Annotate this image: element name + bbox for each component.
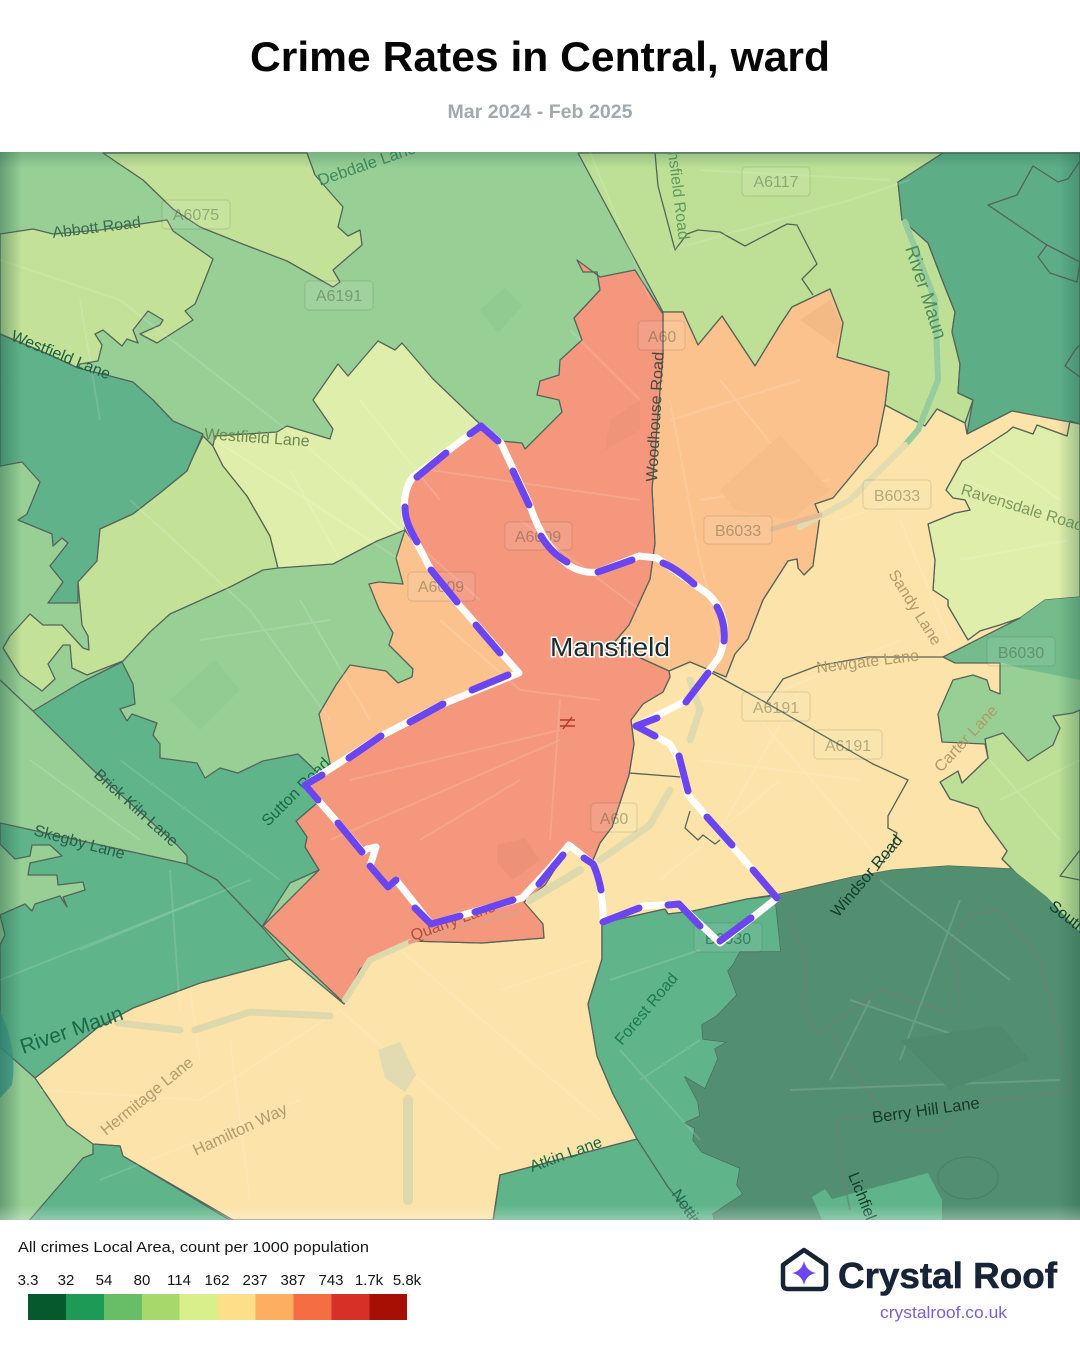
area: red ward and neighbours — [263, 260, 670, 1003]
label: Lichfield: Lichfield — [844, 1170, 882, 1231]
shield: B6033 west — [704, 516, 772, 544]
faint darker paths in dark forest — [788, 910, 1072, 1210]
label: Hermitage Lane: Hermitage Lane — [98, 1054, 197, 1139]
legend scale labels: 743 — [318, 1272, 344, 1289]
label: Quarry Lane: Quarry Lane — [409, 898, 498, 945]
shield: A6075 — [162, 200, 230, 229]
ward outline blue dashes — [305, 426, 777, 941]
area: Skegby green — [0, 823, 290, 1078]
legend scale labels: 54 — [96, 1272, 112, 1289]
area: lime south-east — [940, 710, 1080, 940]
legend scale labels: 162 — [204, 1272, 230, 1289]
icon: railway station — [560, 717, 575, 729]
shield: A6191 east: A6191 — [825, 738, 871, 755]
area: Abbott Road lime — [0, 220, 213, 368]
label: Berry Hill Lane: Berry Hill Lane — [871, 1094, 981, 1127]
label: Westfield Lane centre: Westfield Lane — [204, 426, 310, 450]
shield: A60 north — [638, 321, 685, 350]
faint roads — [0, 152, 1080, 1200]
label: Abbott Road: Abbott Road — [51, 214, 142, 242]
legend scale labels: 237 — [242, 1272, 268, 1289]
label: Sandy Lane: Sandy Lane — [885, 567, 944, 649]
area: west lime — [3, 436, 278, 691]
shield: A60 north: A60 — [648, 329, 676, 346]
legend scale labels: 5.8k — [393, 1272, 422, 1289]
legend — [18, 1239, 422, 1320]
area: Brick Kiln dark green — [33, 662, 319, 927]
legend scale labels — [18, 1272, 422, 1289]
legend scale labels: 32 — [58, 1272, 74, 1289]
shield: A6117 — [742, 167, 810, 196]
label: Forest Road: Forest Road — [612, 970, 682, 1049]
shield: A6075: A6075 — [173, 207, 219, 224]
shield: B6033 east — [863, 480, 931, 509]
shield: A6117: A6117 — [753, 174, 799, 191]
label: Mansfield: Mansfield — [550, 632, 670, 662]
shield: A6009 west — [408, 572, 475, 601]
area: orange west of ward — [319, 530, 519, 768]
area: river teal — [0, 1011, 14, 1098]
legend scale labels: 3.3 — [18, 1272, 38, 1289]
shield: A6191 east — [814, 730, 882, 759]
brand name: Crystal Roof — [838, 1255, 1058, 1296]
area: pale lime north-west of ward — [213, 341, 481, 568]
legend scale labels: 1.7k — [355, 1272, 384, 1289]
label: Windsor Road: Windsor Road — [828, 832, 906, 921]
legend title: All crimes Local Area, count per 1000 population — [18, 1239, 369, 1256]
label: Sutton Road: Sutton Road — [259, 755, 334, 830]
area: darkest green south-east — [685, 866, 1080, 1222]
area: dark green north-east — [898, 153, 1080, 434]
area: green by B6030 — [943, 597, 1080, 680]
district boundary lines — [0, 153, 1080, 1220]
ward boundary: white line with blue dashes — [305, 426, 777, 943]
shield: A60 south — [591, 803, 637, 832]
website url: crystalroof.co.uk — [880, 1304, 1008, 1322]
area: Forest Road green — [493, 895, 781, 1222]
area: small green patch — [812, 1173, 942, 1222]
shield: B6030 south: B6030 — [705, 931, 751, 948]
patch: darker buildings — [313, 325, 998, 1272]
legend scale labels: 80 — [134, 1272, 150, 1289]
shield: A6191 centre: A6191 — [753, 700, 799, 717]
shield: A6009 north — [505, 522, 572, 550]
label: Westfield Lane west: Westfield Lane — [9, 328, 113, 383]
shield: A6191 north: A6191 — [316, 288, 362, 305]
area: orange east — [612, 289, 889, 677]
shield: B6033 west: B6033 — [715, 523, 761, 540]
label: Carter Lane: Carter Lane — [931, 702, 1002, 776]
label: River Maun south: River Maun — [17, 1002, 126, 1059]
shield: A6191 centre — [742, 692, 810, 721]
shield: B6033 east: B6033 — [874, 488, 920, 505]
shield: B6030 south — [694, 923, 762, 952]
ward outline white — [305, 426, 777, 943]
shield: A6009 north: A6009 — [515, 529, 561, 546]
title: Crime Rates in Central, ward — [250, 33, 830, 80]
area: top lime — [103, 153, 362, 287]
label: Mansfield Road: nsfield Road — [664, 150, 692, 241]
area: yellow central-south — [35, 405, 1080, 1220]
road shields — [162, 167, 1055, 952]
legend colour bar — [28, 1294, 407, 1320]
icon: house with star — [783, 1250, 826, 1289]
label: Hamilton Way: Hamilton Way — [190, 1100, 291, 1160]
label: Nottingham: Nottingham — [668, 1187, 729, 1263]
legend scale labels: 114 — [167, 1272, 191, 1289]
shield: B6030 east: B6030 — [998, 645, 1044, 662]
logo: Crystal Roof — [783, 1250, 1058, 1322]
map edge shading — [0, 152, 1080, 1220]
subtitle: date range: Mar 2024 - Feb 2025 — [448, 102, 633, 123]
area: pale lime east — [928, 421, 1080, 640]
shield: A6009 west: A6009 — [418, 579, 464, 596]
faint water and grey features — [118, 222, 938, 1200]
label: Atkin Lane: Atkin Lane — [528, 1134, 605, 1176]
label: River Maun north: River Maun — [900, 243, 950, 342]
area: south-west dark green — [28, 1144, 233, 1222]
area: lime north-east — [578, 153, 973, 426]
label: Woodhouse Road: Woodhouse Road — [643, 351, 668, 482]
area: west dark green — [0, 334, 203, 603]
label: Brick Kiln Lane: Brick Kiln Lane — [90, 766, 181, 850]
shield: A6191 north — [305, 281, 373, 310]
shield: A60 south: A60 — [600, 811, 628, 828]
shield: B6030 east — [987, 637, 1055, 666]
label: Debdale Lane: Debdale Lane — [315, 139, 418, 190]
label: Skegby Lane: Skegby Lane — [32, 822, 127, 863]
label: Newgate Lane: Newgate Lane — [815, 648, 920, 677]
legend scale labels: 387 — [280, 1272, 306, 1289]
